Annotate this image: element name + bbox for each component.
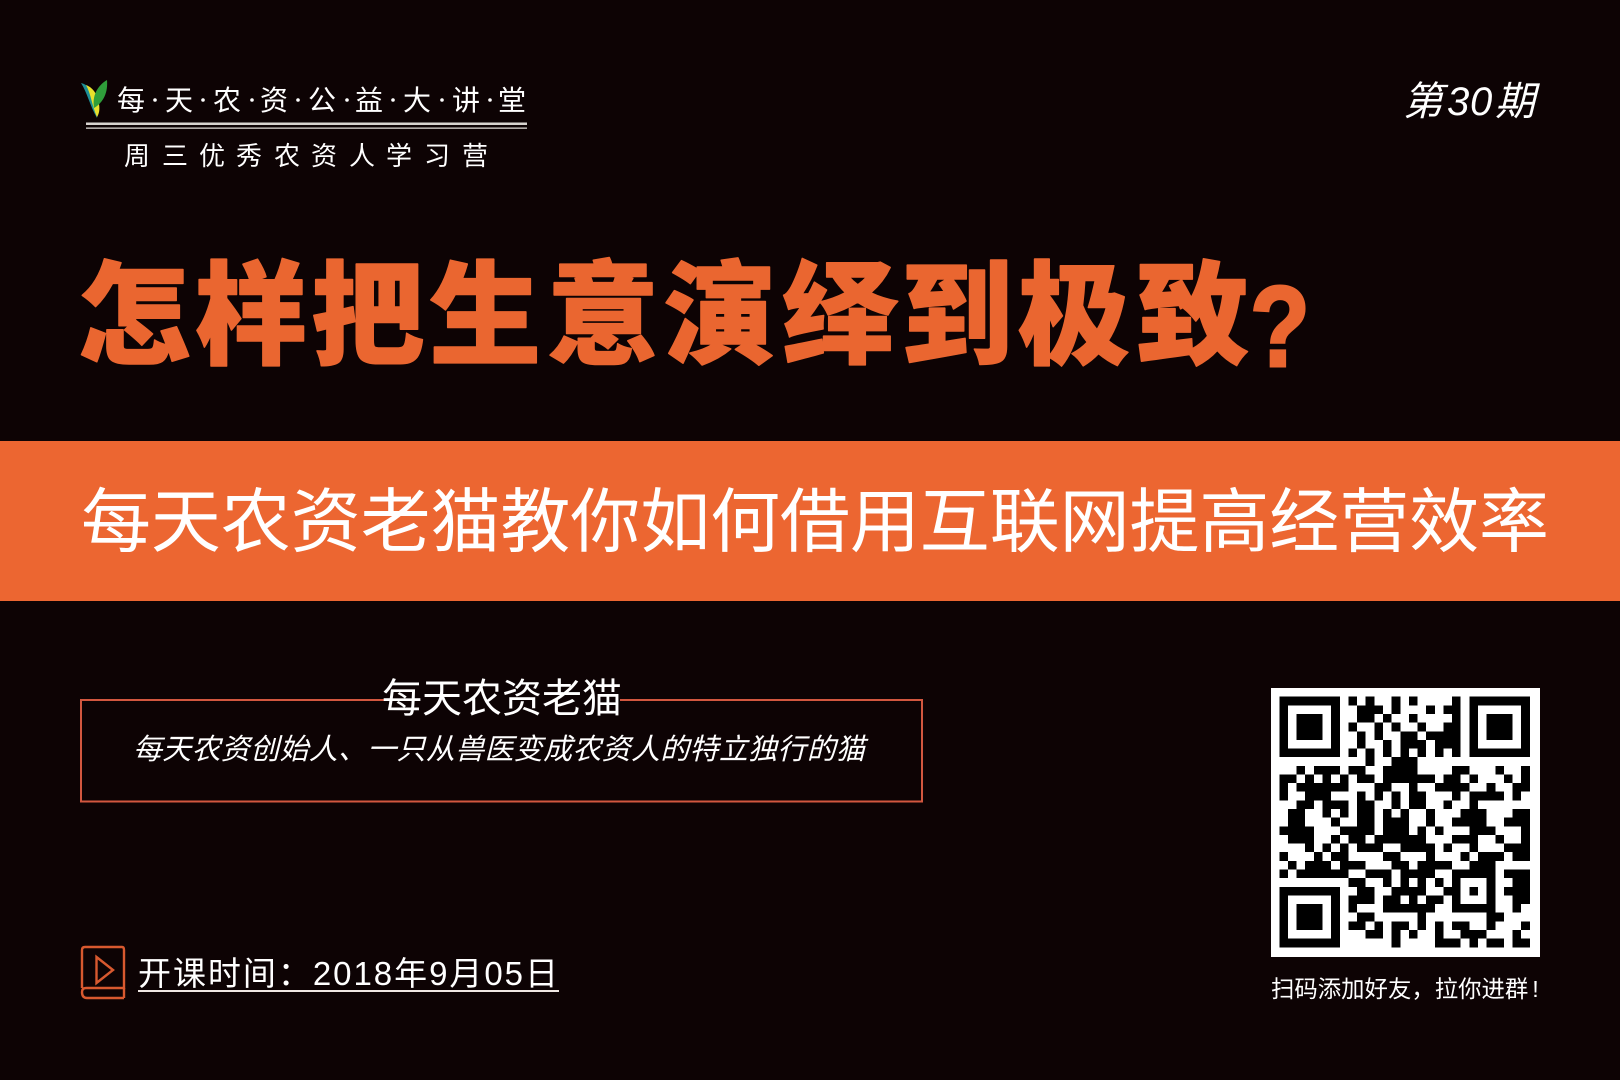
logo title text: 每天农资公益大讲堂 — [117, 79, 526, 119]
main title — [78, 226, 1310, 391]
orange banner — [0, 441, 1620, 601]
issue number: 第30期 — [1403, 80, 1540, 124]
QR code panel — [1271, 688, 1540, 957]
title characters: 怎样把生意演绎到极致 — [78, 226, 1249, 388]
QR finder patterns — [1279, 697, 1530, 947]
course time underline — [138, 990, 559, 992]
speaker name: 每天农资老猫 — [382, 666, 622, 724]
title question mark: ? — [1250, 263, 1310, 391]
course time text: 开课时间：2018年9月05日 — [138, 955, 558, 992]
logo title separator dots — [153, 98, 492, 102]
course time row — [82, 947, 559, 998]
speaker box — [81, 666, 922, 802]
icon: book with play triangle — [82, 947, 124, 998]
QR data modules — [1279, 697, 1530, 947]
box outline — [81, 700, 922, 802]
icon: green and yellow leaf logo — [81, 80, 107, 118]
speaker description: 每天农资创始人、一只从兽医变成农资人的特立独行的猫 — [133, 726, 869, 768]
logo block — [81, 79, 527, 173]
QR caption: 扫码添加好友，拉你进群! — [1271, 976, 1539, 1002]
logo subtitle text: 周三优秀农资人学习营 — [124, 136, 488, 173]
banner text: 每天农资老猫教你如何借用互联网提高经营效率 — [81, 466, 1549, 567]
